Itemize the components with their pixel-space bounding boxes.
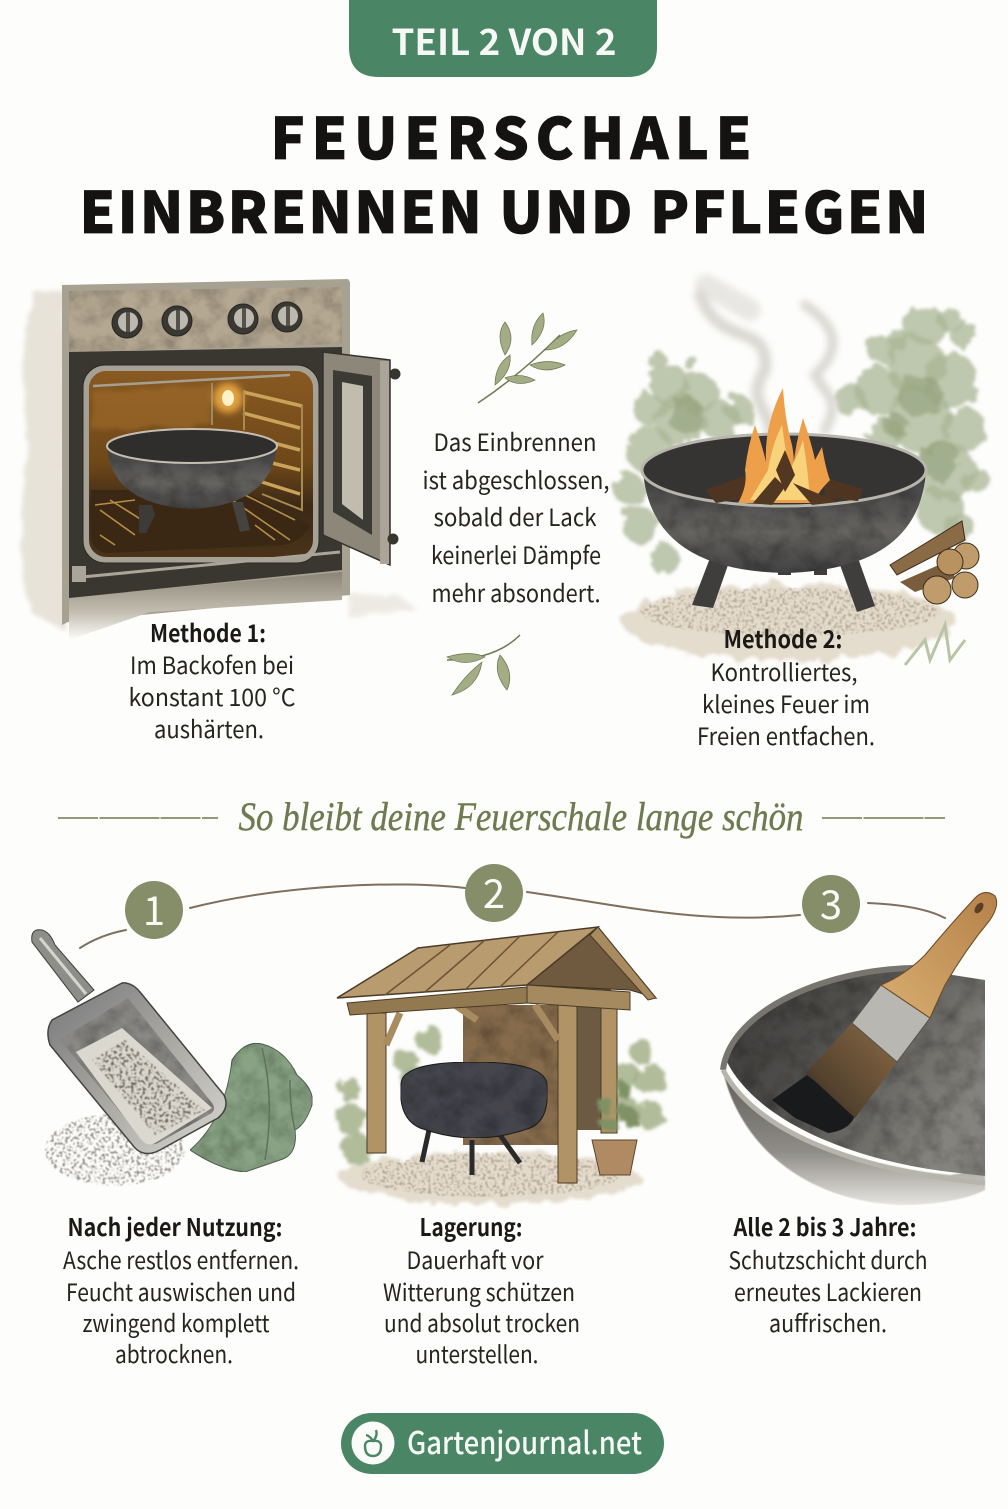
text: step 2: Witterung schützen	[383, 1273, 575, 1308]
covered bowl	[401, 1062, 547, 1175]
fire bowl legs	[692, 558, 875, 612]
text: step 1: Nach jeder Nutzung:	[68, 1208, 282, 1243]
step number 3	[802, 873, 860, 933]
illustration: shed with covered bowl	[336, 927, 666, 1204]
illustration: brush painting bowl	[723, 892, 997, 1205]
icon: leaf branch top	[478, 313, 577, 403]
text: step 1: Asche restlos entfernen.	[63, 1241, 299, 1276]
text: method 1: aushärten.	[154, 710, 264, 745]
gable	[527, 927, 656, 998]
text: center note: sobald der Lack	[434, 498, 596, 533]
text: center note	[422, 423, 610, 609]
step number 3: 3	[820, 873, 842, 931]
oven interior	[83, 365, 319, 563]
step connector line	[80, 884, 945, 948]
oven control panel	[69, 287, 342, 352]
step number 1: 1	[143, 879, 165, 937]
grass	[905, 625, 965, 665]
oven rail	[72, 552, 340, 578]
text: method 1: Im Backofen bei	[130, 646, 294, 681]
text: method 1	[128, 614, 296, 745]
text: step 3: Schutzschicht durch	[728, 1241, 928, 1276]
text: method 2	[697, 620, 875, 752]
text: center note: mehr absondert.	[432, 574, 600, 609]
brush bristles	[806, 1023, 897, 1118]
scoop handle	[32, 930, 94, 1002]
footer logo pill: Gartenjournal.net	[407, 1418, 642, 1463]
step number 1	[125, 879, 183, 939]
text: method 2: kleines Feuer im	[702, 685, 870, 720]
brush handle	[881, 892, 997, 1018]
text: step 3	[728, 1208, 928, 1339]
text: step 2: unterstellen.	[416, 1335, 538, 1370]
title: FEUERSCHALE	[270, 94, 752, 176]
footer logo pill	[341, 1413, 664, 1474]
back wall	[463, 1005, 561, 1145]
text: method 2: Kontrolliertes,	[710, 653, 858, 688]
text: step 2: Lagerung:	[420, 1208, 522, 1243]
title	[80, 94, 928, 250]
text: step 2: Dauerhaft vor	[406, 1241, 544, 1276]
text: method 1: Methode 1:	[150, 614, 266, 649]
oven bowl	[107, 429, 277, 533]
paint stroke	[772, 1075, 855, 1133]
illustration: oven with fire bowl	[20, 279, 420, 640]
badge: part 2 of 2	[349, 0, 657, 77]
text: step 1: zwingend komplett	[82, 1304, 270, 1339]
smoke	[700, 285, 833, 430]
illustration: fire bowl outdoors	[614, 285, 989, 665]
text: step 2: und absolut trocken	[384, 1304, 580, 1339]
fire bowl	[642, 434, 926, 573]
text: step 1	[63, 1208, 299, 1370]
text: method 1: konstant 100 °C	[128, 678, 296, 713]
oven door	[323, 352, 400, 565]
text: method 2: Freien entfachen.	[697, 717, 875, 752]
log pile	[890, 521, 979, 604]
bowl exterior	[723, 1070, 985, 1205]
text: center note: ist abgeschlossen,	[422, 461, 610, 496]
step number 2: 2	[483, 862, 505, 920]
bowl interior	[726, 970, 985, 1176]
text: step 1: Feucht auswischen und	[66, 1273, 296, 1308]
bushes	[614, 305, 989, 575]
title: EINBRENNEN UND PFLEGEN	[80, 168, 928, 250]
text: step 3: Alle 2 bis 3 Jahre:	[733, 1208, 916, 1243]
posts	[367, 1003, 617, 1183]
text: center note: Das Einbrennen	[434, 423, 596, 458]
potted plant	[592, 1082, 637, 1175]
section heading: So bleibt deine Feuerschale lange schön	[238, 794, 804, 839]
text: step 3: erneutes Lackieren	[734, 1273, 922, 1308]
text: step 3: auffrischen.	[769, 1304, 887, 1339]
text: method 2: Methode 2:	[724, 620, 842, 655]
text: center note: keinerlei Dämpfe	[431, 536, 601, 571]
roof	[337, 927, 598, 998]
illustration: ash scoop and cloth	[32, 930, 312, 1186]
cloth	[190, 1043, 312, 1172]
beams	[347, 987, 527, 1015]
ground	[622, 584, 958, 660]
logs and flames	[705, 388, 863, 505]
scoop body	[48, 983, 226, 1154]
text: step 1: abtrocknen.	[115, 1335, 233, 1370]
badge: part 2 of 2: TEIL 2 VON 2	[392, 14, 616, 66]
brush ferrule	[852, 985, 930, 1062]
text: step 2	[383, 1208, 580, 1370]
step number 2	[465, 862, 523, 922]
icon: leaf branch bottom	[447, 635, 520, 695]
icon: plant logo	[352, 1422, 394, 1464]
